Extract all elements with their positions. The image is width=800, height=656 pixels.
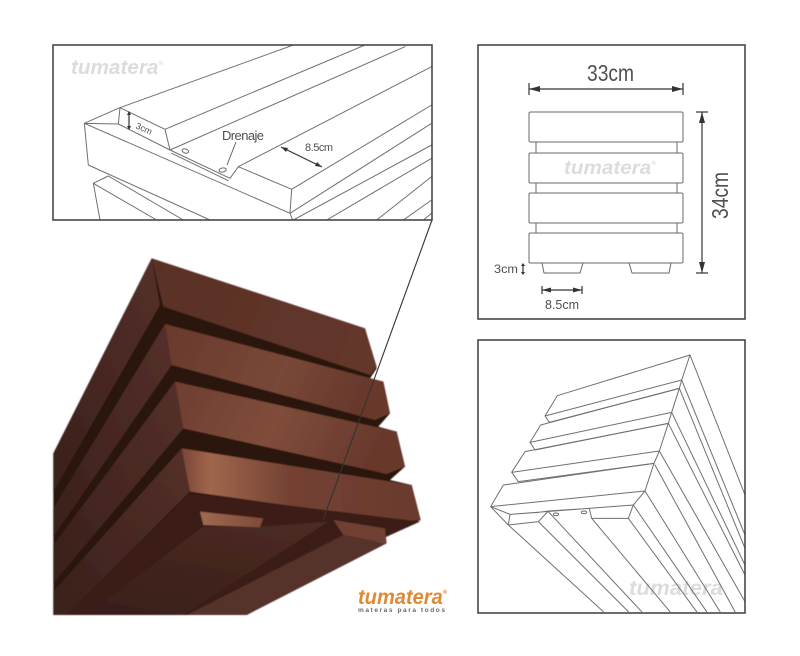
- dimension arrow: 3cm: [521, 263, 525, 275]
- panel: isometric line drawing: [478, 340, 745, 613]
- drawing: isometric planter: [491, 355, 745, 612]
- watermark: isometric: tumatera: [629, 577, 723, 600]
- label: 3cm: 3cm: [494, 262, 518, 276]
- drawing: top slat perspective: [84, 45, 432, 222]
- slat top faces: [152, 258, 421, 522]
- panel: drainage detail: [53, 45, 432, 222]
- leader line from detail panel to photo: [323, 220, 432, 520]
- panel border: [53, 45, 432, 220]
- photo silhouette: [53, 258, 421, 615]
- label: 34cm: 34cm: [707, 172, 733, 219]
- logo wordmark: ®: [443, 589, 448, 596]
- logo tagline: materas para todos: [358, 607, 445, 614]
- watermark: front view: tumatera: [564, 158, 644, 179]
- left side faces: [53, 258, 190, 615]
- leader: Drenaje: [227, 142, 236, 165]
- label: 3cm: 3cm: [134, 121, 154, 137]
- underside of planter: [67, 493, 420, 615]
- label: 8.5cm: 8.5cm: [545, 297, 579, 312]
- dimension arrow: 33cm: [529, 83, 683, 95]
- watermark: detail panel: ®: [158, 60, 164, 67]
- dimension arrow: 34cm: [696, 112, 708, 273]
- label: 33cm: 33cm: [587, 60, 634, 86]
- label: Drenaje: Drenaje: [222, 128, 264, 143]
- label: 8.5cm: 8.5cm: [305, 142, 333, 154]
- frame: front elevation: [478, 45, 745, 319]
- dimension arrow: 8.5cm: [281, 147, 322, 167]
- watermark: detail panel: tumatera: [71, 57, 155, 79]
- watermark: front view: ®: [651, 160, 657, 167]
- drawing: planter front view: [529, 112, 683, 273]
- photo: brown planter: [53, 258, 421, 615]
- frame: isometric: [478, 340, 745, 613]
- dimension arrow: 8.5cm: [542, 286, 582, 294]
- dimension arrow: 3cm: [127, 111, 131, 130]
- logo wordmark: tumatera: [358, 586, 447, 609]
- panel: front elevation with dimensions: [478, 45, 745, 319]
- logo: tumatera: [358, 586, 448, 614]
